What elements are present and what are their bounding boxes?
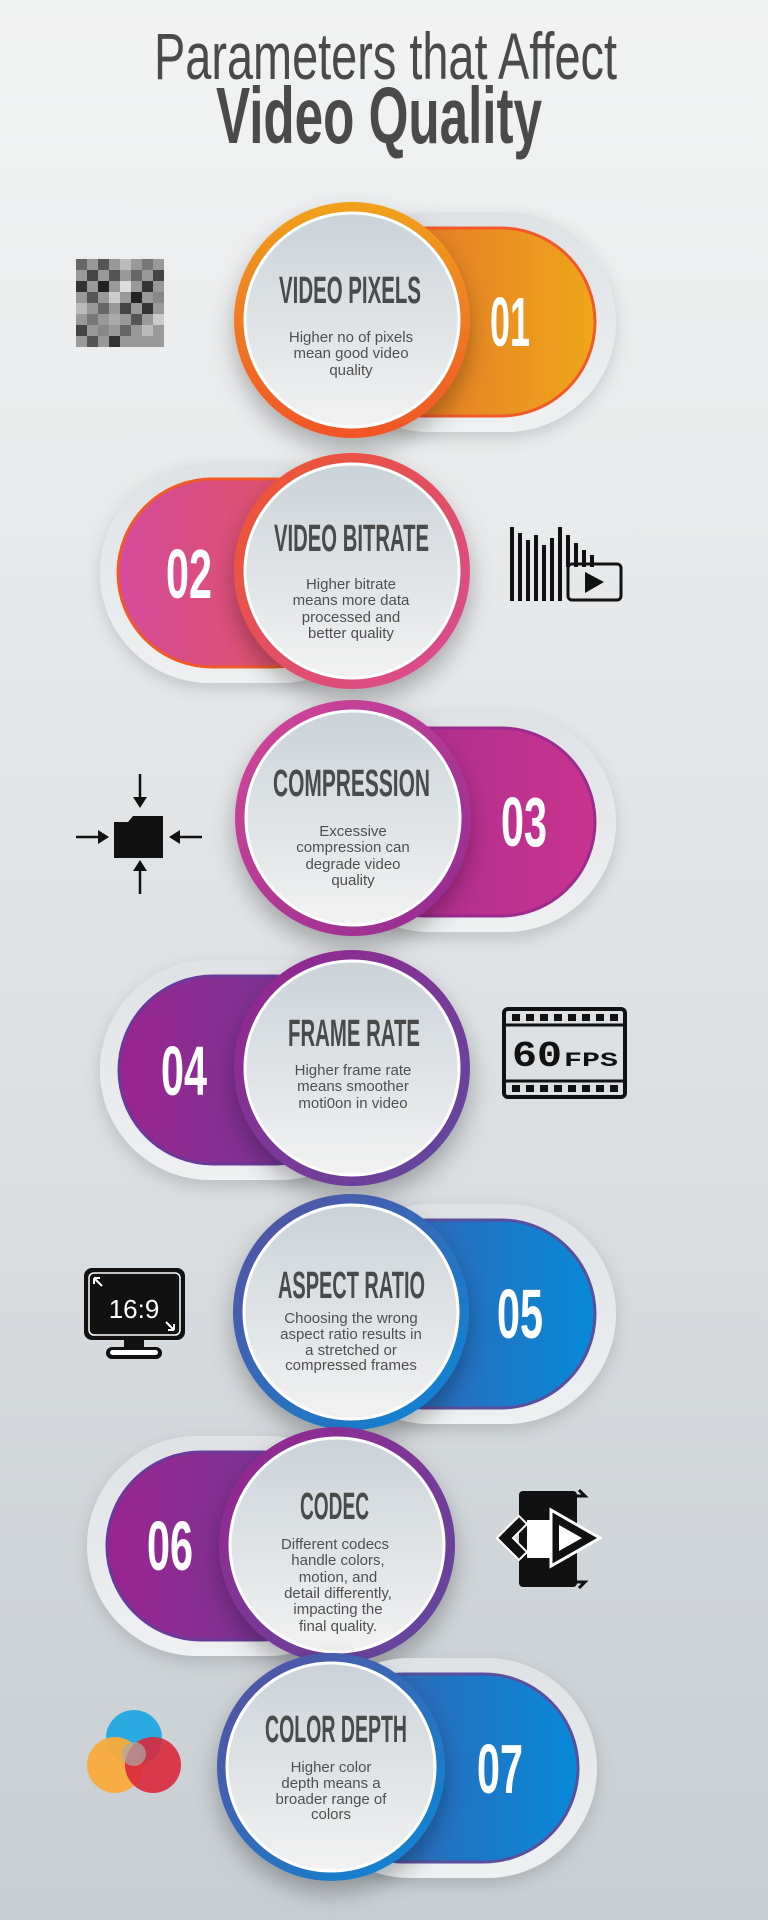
icon: codec [497, 1490, 600, 1588]
body: aspect ratio results in [280, 1326, 422, 1343]
body: detail differently, [284, 1585, 392, 1602]
body: means more data [293, 592, 410, 609]
body: Higher no of pixels [289, 329, 413, 346]
body: depth means a [281, 1775, 381, 1792]
panel: 04 frame rate [100, 950, 470, 1186]
body: degrade video [305, 856, 401, 873]
number 05: 05 [497, 1275, 543, 1353]
body: Higher frame rate [295, 1062, 411, 1079]
heading: COLOR DEPTH [265, 1709, 407, 1751]
body: handle colors, [291, 1552, 385, 1569]
heading: ASPECT RATIO [278, 1265, 425, 1307]
body: Higher color [291, 1759, 371, 1776]
number 02: 02 [166, 535, 212, 613]
body: final quality. [299, 1618, 377, 1635]
icon: 60fps film [504, 1009, 625, 1097]
number 06: 06 [147, 1507, 193, 1585]
title [154, 19, 617, 160]
body: compression can [296, 839, 410, 856]
body: Choosing the wrong [284, 1310, 418, 1327]
panel: 06 codec [87, 1427, 455, 1663]
body: mean good video [293, 345, 409, 362]
heading: CODEC [300, 1486, 369, 1528]
heading: COMPRESSION [273, 763, 430, 805]
body: motion, and [299, 1569, 377, 1586]
body: quality [329, 362, 373, 379]
heading: VIDEO PIXELS [279, 270, 421, 312]
panel: 02 video bitrate [100, 453, 470, 689]
icon: 16:9 monitor: 16:9 [109, 1294, 159, 1324]
number 01: 01 [490, 283, 530, 361]
icon: color circles [87, 1710, 181, 1793]
body: processed and [302, 609, 400, 626]
number 07: 07 [477, 1730, 523, 1808]
number 03: 03 [501, 783, 547, 861]
body: broader range of [276, 1791, 387, 1808]
body: Different codecs [281, 1536, 389, 1553]
body: compressed frames [285, 1357, 417, 1374]
icon: bitrate bars with play [510, 527, 621, 601]
heading: VIDEO BITRATE [274, 518, 429, 560]
icon: pixel mosaic [76, 259, 164, 347]
body: better quality [308, 625, 394, 642]
body: moti0on in video [298, 1095, 408, 1112]
body: a stretched or [305, 1342, 397, 1359]
panel: 01 video pixels [234, 202, 616, 438]
body: colors [311, 1806, 351, 1823]
body: means smoother [297, 1078, 409, 1095]
body: quality [331, 872, 375, 889]
icon: 60fps film: 60 [512, 1036, 562, 1077]
body: impacting the [293, 1601, 383, 1618]
title: Video Quality [216, 71, 542, 160]
body: Higher bitrate [306, 576, 396, 593]
panel: 05 aspect ratio [233, 1194, 616, 1430]
body: Excessive [319, 823, 387, 840]
heading: FRAME RATE [288, 1013, 420, 1055]
panel: 03 compression [235, 700, 616, 936]
number 04: 04 [161, 1032, 207, 1110]
icon: 16:9 monitor [84, 1268, 185, 1359]
icon: 60fps film: FPS [564, 1050, 618, 1073]
panel: 07 color depth [217, 1653, 597, 1881]
icon: compression arrows [76, 774, 202, 894]
